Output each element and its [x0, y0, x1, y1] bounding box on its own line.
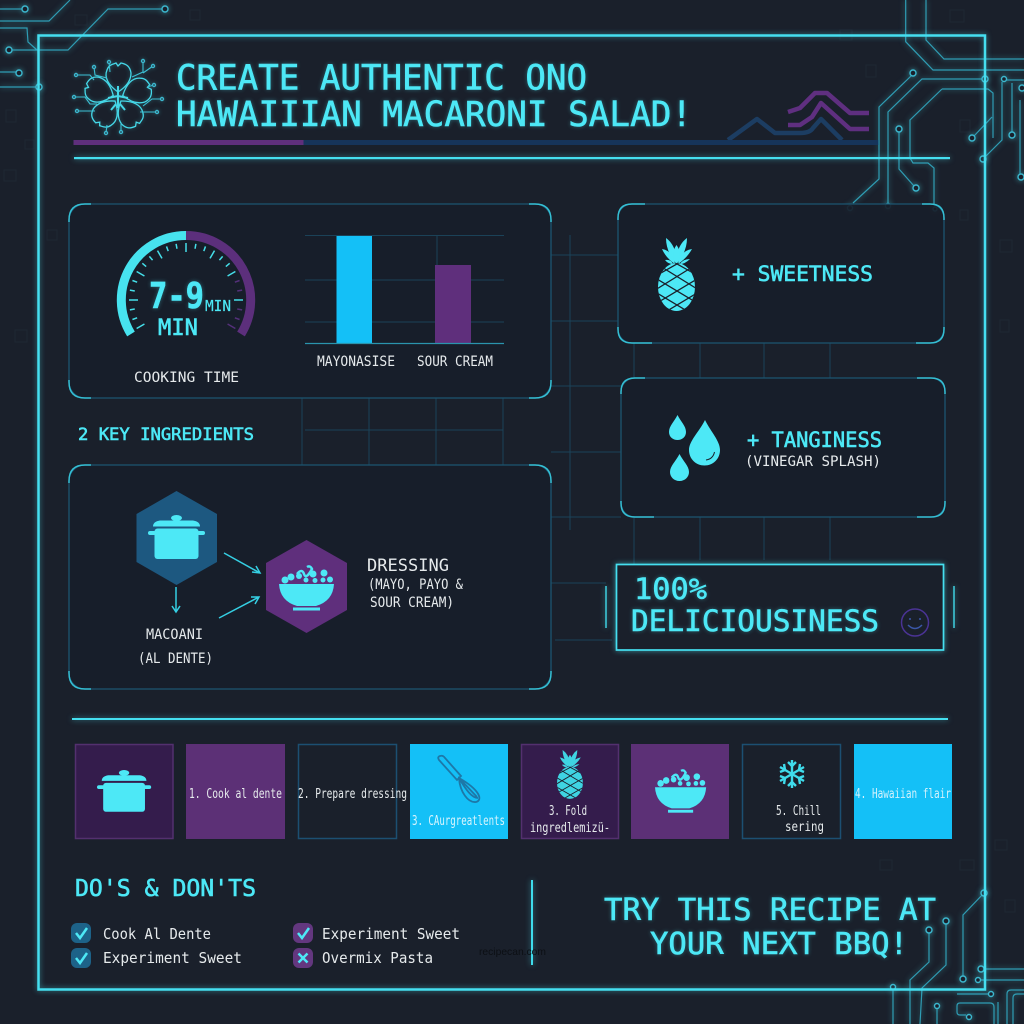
label: macaroni: (AL DENTE)	[138, 651, 213, 667]
label: tanginess: + TANGINESS	[747, 428, 882, 453]
item: experiment sweet: Experiment Sweet	[103, 949, 242, 967]
icon: circuit hibiscus flower	[72, 60, 164, 134]
panel: cooking time and ingredient ratio	[69, 204, 551, 398]
header progress bar	[74, 140, 878, 145]
watermark: recipecan.com	[479, 946, 546, 958]
bar chart: mayonnaise vs sour cream	[305, 236, 504, 370]
icon: vinegar drops	[669, 415, 720, 481]
step tile: chill and serve: sering	[785, 820, 824, 835]
item: overmix pasta: Overmix Pasta	[322, 949, 433, 967]
step tile: whisk ingredients	[410, 744, 508, 839]
title: HAWAIIIAN MACARONI SALAD!	[176, 95, 692, 135]
title	[176, 58, 692, 135]
circuit traces: top right	[848, 0, 1024, 211]
step tile: chill and serve	[742, 744, 840, 838]
item: cook al dente: Cook Al Dente	[103, 925, 211, 943]
panel: sweetness	[618, 204, 944, 343]
callout: 100% deliciousness: 100%	[634, 572, 707, 606]
arrows: flow to dressing	[172, 553, 260, 618]
step tile: chill and serve: 5. Chill	[776, 804, 821, 819]
callout: 100% deliciousness	[606, 564, 954, 650]
step tile: fold ingredients	[522, 744, 618, 838]
step tile: bowl icon	[631, 744, 729, 839]
checklist	[71, 923, 460, 968]
vertical divider	[531, 880, 533, 965]
panel: tanginess	[621, 378, 945, 517]
label: cooking time: COOKING TIME	[134, 370, 239, 386]
call to action	[604, 893, 936, 962]
icon: snowflake	[780, 760, 804, 788]
heading: do's and don'ts: DO'S & DON'TS	[75, 876, 256, 902]
item: cook al dente	[71, 923, 211, 943]
callout: 100% deliciousness: DELICIOUSINESS	[631, 604, 879, 638]
label: dressing	[367, 556, 463, 611]
label: tanginess	[745, 428, 882, 470]
gauge: cooking time: 7-9	[149, 276, 204, 317]
bar chart: mayonnaise vs sour cream: MAYONASISE	[317, 354, 395, 370]
gauge: cooking time	[121, 235, 251, 341]
step tile: fold ingredients: ingredlemizü-	[530, 821, 610, 836]
label: dressing: DRESSING	[367, 556, 449, 576]
circuit traces: top left	[0, 0, 168, 90]
step tile: hawaiian flair: 4. Hawaiian flair	[855, 787, 951, 802]
step tile: fold ingredients: 3. Fold	[549, 804, 587, 819]
icon: mountain waves	[728, 93, 869, 140]
header divider	[74, 157, 950, 159]
label: dressing: SOUR CREAM)	[370, 595, 454, 611]
call to action: TRY THIS RECIPE AT	[604, 893, 936, 928]
background grid	[302, 235, 830, 640]
item: experiment sweet (purple): Experiment Sweet	[322, 925, 460, 943]
step tile: whisk ingredients: 3. CAurgreatlents	[412, 814, 505, 829]
icon: smiley	[902, 609, 928, 636]
step tile: cook al dente	[186, 744, 285, 839]
step tile: cook al dente: 1. Cook al dente	[189, 787, 282, 802]
hexagon: pot	[136, 491, 217, 585]
label: dressing: (MAYO, PAYO &	[368, 577, 463, 593]
step tile: pot icon	[76, 744, 173, 838]
icon: pineapple	[652, 238, 702, 318]
step tile: prepare dressing: 2. Prepare dressing	[298, 787, 407, 802]
step tile: hawaiian flair	[854, 744, 952, 839]
hexagon: bowl	[266, 540, 347, 633]
label: tanginess: (VINEGAR SPLASH)	[745, 454, 881, 470]
section divider	[72, 718, 948, 720]
header	[72, 58, 878, 145]
title: CREATE AUTHENTIC ONO	[176, 58, 587, 98]
label: macaroni	[138, 627, 213, 667]
process steps strip	[76, 744, 952, 839]
panel: ingredient flow	[69, 465, 551, 689]
label: macaroni: MACOANI	[146, 627, 203, 643]
call to action: YOUR NEXT BBQ!	[650, 927, 908, 962]
label: sweetness: + SWEETNESS	[732, 262, 873, 287]
heading: key ingredients: 2 KEY INGREDIENTS	[78, 425, 254, 445]
item: overmix pasta	[293, 948, 433, 968]
gauge: cooking time: MIN	[205, 297, 231, 315]
step tile: prepare dressing	[298, 744, 407, 838]
item: experiment sweet	[71, 948, 242, 968]
bar chart: mayonnaise vs sour cream: SOUR CREAM	[417, 354, 493, 370]
gauge: cooking time: MIN	[158, 316, 198, 341]
circuit traces: bottom right	[890, 890, 1024, 1024]
